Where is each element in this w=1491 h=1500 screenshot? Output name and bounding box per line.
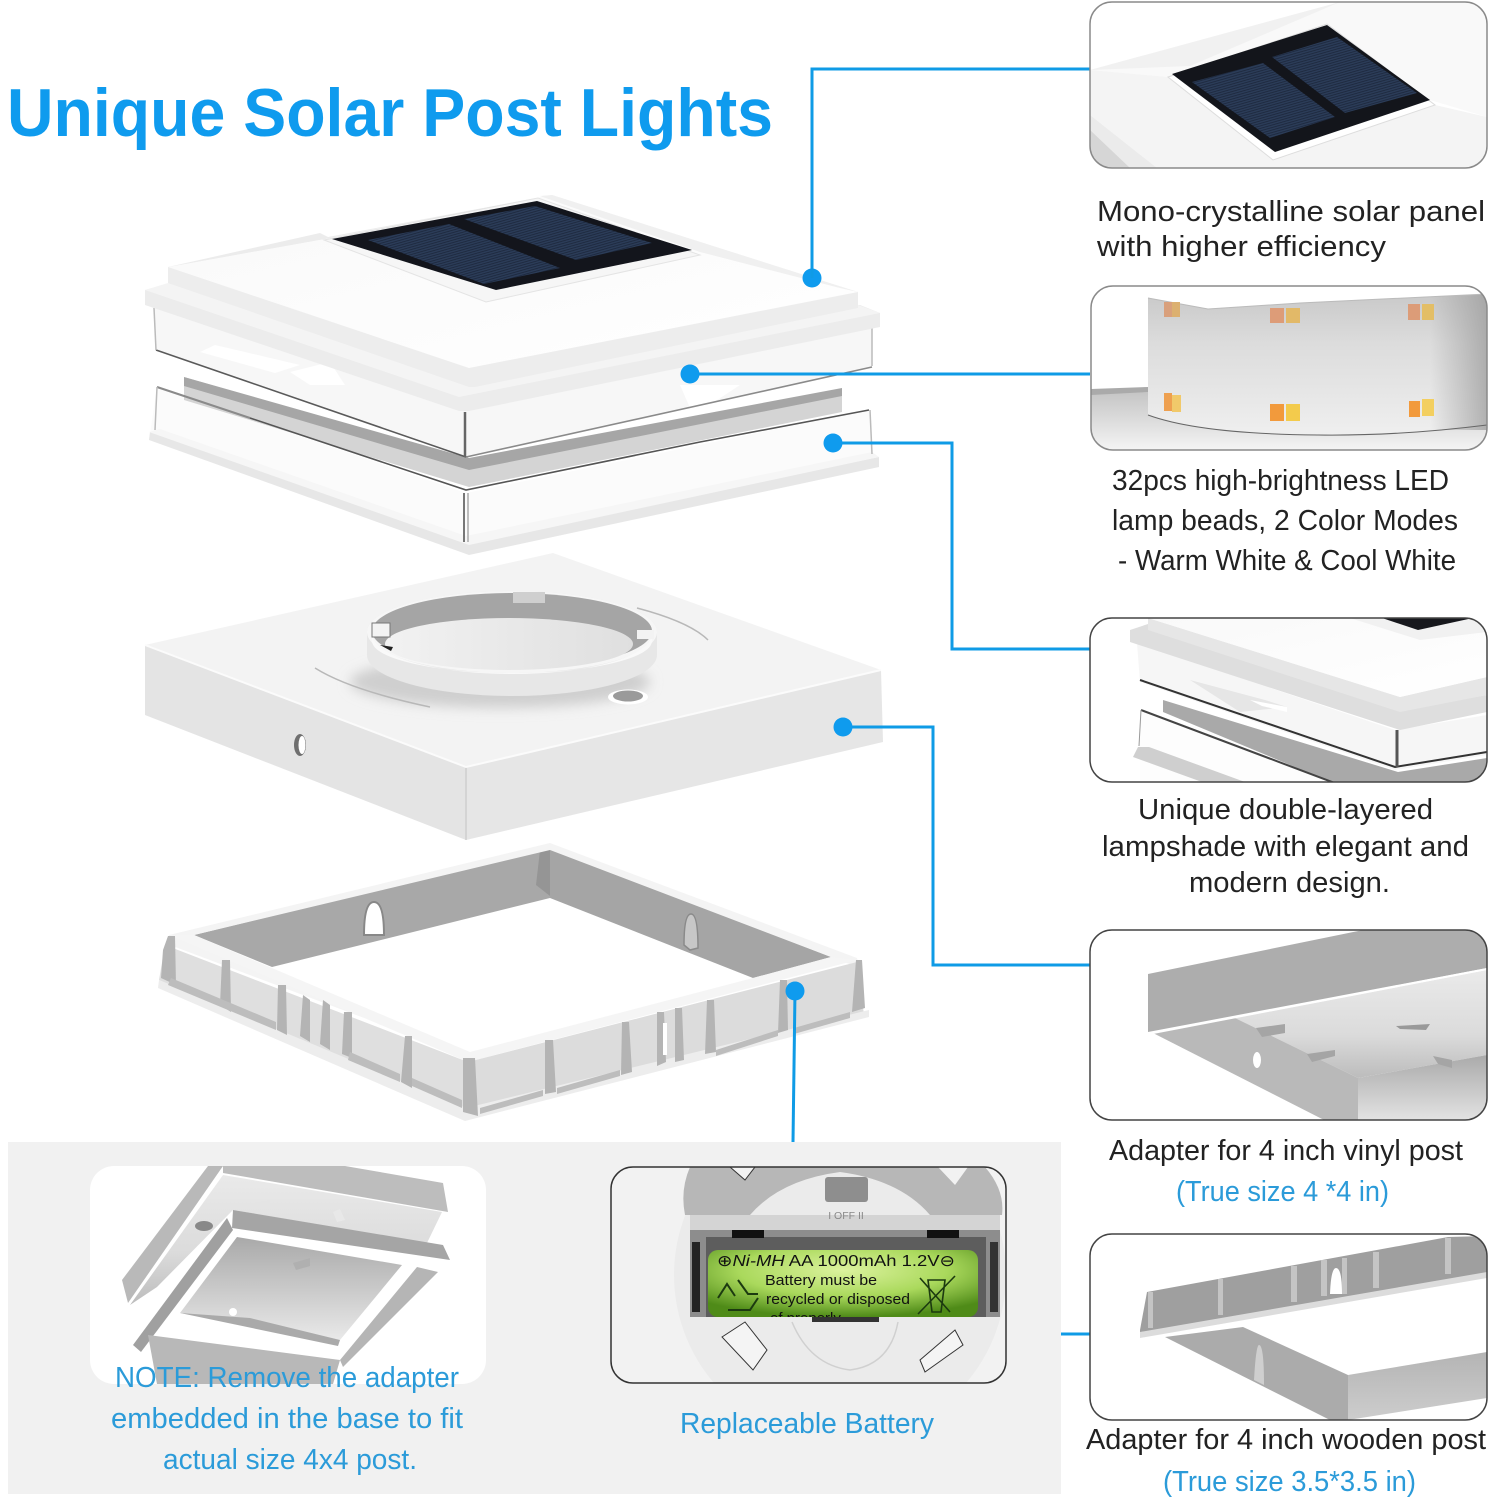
note text: actual size 4x4 post. [163,1444,417,1476]
note text [111,1362,463,1476]
battery label: Battery must be [765,1272,877,1289]
caption: LED beads: lamp beads, 2 Color Modes [1112,505,1458,537]
illustration: square adapter frame [158,843,869,1121]
battery label [717,1254,956,1317]
rim of roof [145,283,880,411]
caption: lampshade: lampshade with elegant and [1102,831,1469,863]
caption: wooden adapter: (True size 3.5*3.5 in) [1163,1466,1416,1498]
upper glass shade [154,306,872,457]
slots [364,902,384,935]
frame ribs [161,936,865,1116]
panel: adapter removal illustration [90,1166,486,1384]
icon: crossed bin [918,1276,955,1314]
caption: LED beads: 32pcs high-brightness LED [1112,465,1449,497]
panel: solar panel close-up [1090,2,1487,168]
caption: vinyl adapter [1109,1135,1463,1208]
caption: replaceable battery: Replaceable Battery [680,1408,934,1440]
caption: solar panel [1096,196,1485,263]
connector lines and dots [680,69,1090,1334]
caption: vinyl adapter: (True size 4 *4 in) [1176,1176,1389,1208]
switch label: I OFF II [828,1210,864,1222]
caption: LED beads [1112,465,1458,577]
battery label: ⊕Ni-MH AA 1000mAh 1.2V⊖ [717,1253,955,1270]
panel: bottom grey background [8,1142,1061,1494]
illustration: lamp top assembly [145,195,880,555]
hole [608,690,648,704]
solar panel [324,198,700,302]
illustration: lamp base plate [145,553,883,840]
note text: NOTE: Remove the adapter [115,1362,459,1394]
roof cap [168,195,858,387]
LED chips [1164,302,1434,421]
caption: lampshade [1102,794,1469,899]
lower glass shade [150,387,872,546]
caption: lampshade: Unique double-layered [1138,794,1433,826]
panel: LED beads close-up [1091,286,1490,450]
battery label: of properly [770,1310,841,1327]
front walls [159,945,468,1115]
side hole [294,734,306,756]
caption: lampshade: modern design. [1189,867,1390,899]
panel: wooden post adapter close-up [1090,1234,1487,1420]
panel: double-layered lampshade close-up [1090,618,1487,790]
ring shadow [350,656,650,708]
battery label: recycled or disposed [766,1291,910,1308]
caption: LED beads: - Warm White & Cool White [1118,545,1456,577]
callout dots on lamp [802,268,822,288]
caption: wooden adapter: Adapter for 4 inch wooden post [1086,1424,1486,1456]
caption: vinyl adapter: Adapter for 4 inch vinyl post [1109,1135,1463,1167]
panel: replaceable battery photo [610,1166,1007,1384]
caption: solar panel: with higher efficiency [1096,231,1387,263]
caption: wooden adapter [1086,1424,1486,1498]
caption: solar panel: Mono-crystalline solar panel [1097,196,1485,228]
icon: recycle [718,1280,758,1310]
title: Unique Solar Post Lights [7,75,773,151]
mounting ring [367,591,657,696]
note text: embedded in the base to fit [111,1403,463,1435]
panel: vinyl post adapter close-up [1090,929,1487,1122]
